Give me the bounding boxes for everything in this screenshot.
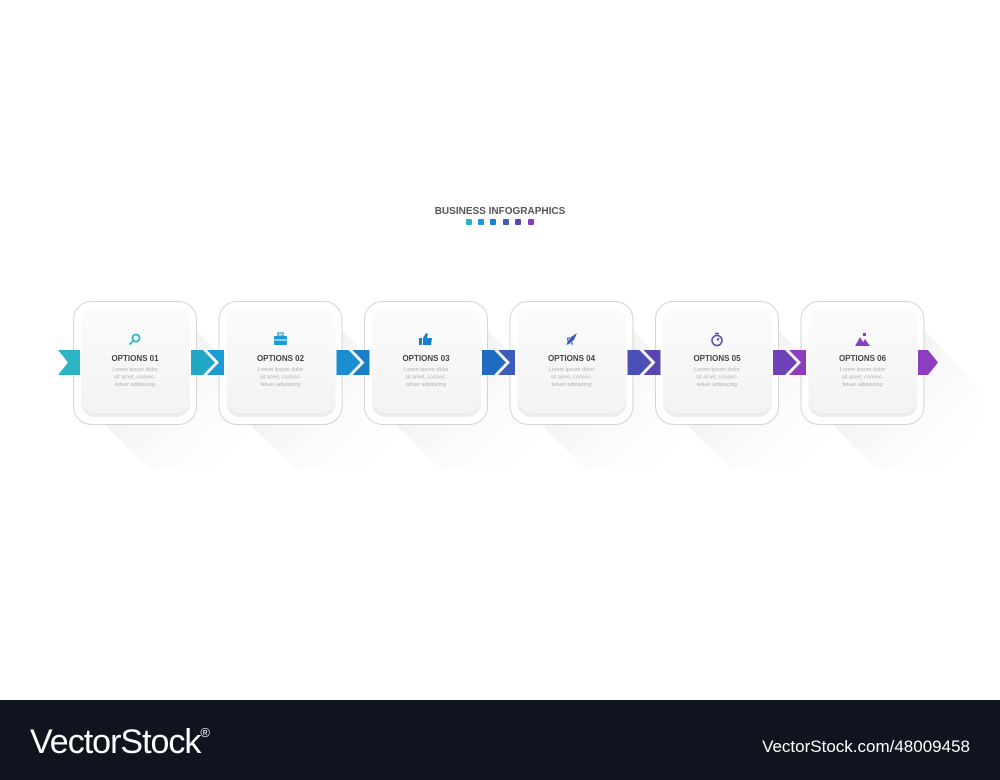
card 1: Lorem ipsum dolor: [112, 367, 158, 373]
icon: thumbs up: [419, 333, 432, 345]
card 3: [364, 302, 488, 424]
arrow: 2 to 3: [336, 350, 370, 375]
card 1: sit amet, consec-: [114, 374, 156, 380]
card 1: OPTIONS 01: [111, 354, 159, 363]
card 2: OPTIONS 02: [257, 354, 305, 363]
arrow: 4 to 5: [628, 350, 660, 375]
icon: briefcase: [274, 333, 287, 345]
card 6: tetuer adipiscing: [842, 382, 883, 388]
card 5: Lorem ipsum dolor: [694, 367, 740, 373]
card 4: OPTIONS 04: [548, 354, 596, 363]
card 3: Lorem ipsum dolor: [403, 367, 449, 373]
card 2: [219, 302, 342, 424]
card 2: sit amet, consec-: [260, 374, 301, 380]
card 3: tetuer adipiscing: [406, 382, 446, 388]
footer: [0, 700, 1000, 780]
title: BUSINESS INFOGRAPHICS: [435, 206, 566, 217]
footer: ®: [200, 725, 210, 740]
card 6: [801, 302, 924, 424]
card 1: tetuer adipiscing: [115, 382, 155, 388]
icon: rocket: [566, 333, 577, 345]
card 4: [510, 302, 633, 424]
arrow: 3 to 4: [482, 350, 515, 375]
card 2: tetuer adipiscing: [260, 382, 301, 388]
card 3: OPTIONS 03: [402, 354, 450, 363]
card 2: Lorem ipsum dolor: [258, 367, 303, 373]
arrow: end: [918, 350, 938, 375]
card 4: Lorem ipsum dolor: [549, 367, 594, 373]
card 4: tetuer adipiscing: [551, 382, 592, 388]
card 1: [74, 302, 196, 424]
shadows: [90, 308, 978, 470]
footer: VectorStock.com/48009458: [762, 737, 970, 756]
arrow: start tail: [58, 350, 80, 375]
card 6: Lorem ipsum dolor: [840, 367, 885, 373]
card 5: [656, 302, 778, 424]
card 5: OPTIONS 05: [693, 354, 741, 363]
footer: VectorStock: [30, 723, 200, 761]
icon: stopwatch: [712, 334, 722, 346]
card 3: sit amet, consec-: [405, 374, 447, 380]
card 5: tetuer adipiscing: [697, 382, 737, 388]
card 6: sit amet, consec-: [842, 374, 883, 380]
arrow: 5 to 6: [773, 350, 806, 375]
card 4: sit amet, consec-: [551, 374, 592, 380]
icon: mountain: [855, 333, 870, 346]
title: [435, 206, 566, 225]
card 6: OPTIONS 06: [839, 354, 887, 363]
card 5: sit amet, consec-: [696, 374, 738, 380]
icon: search: [130, 334, 140, 344]
arrow: 1 to 2: [191, 350, 224, 375]
